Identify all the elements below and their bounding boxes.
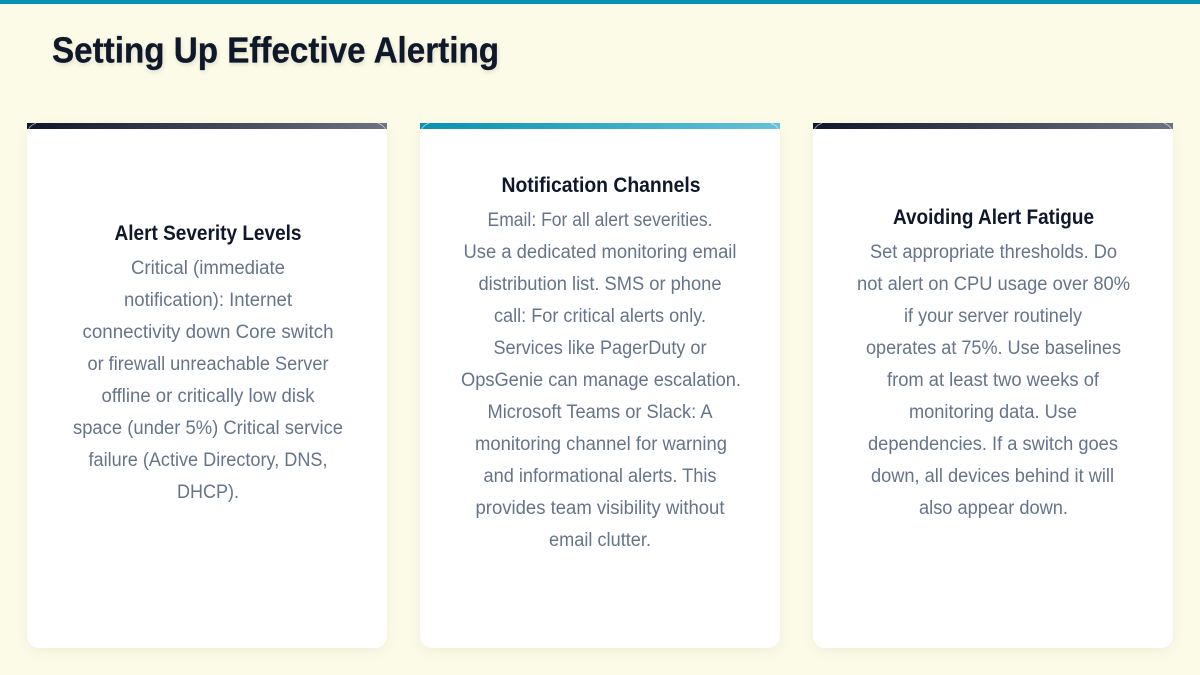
text block: channels description [461,210,741,551]
panel text [857,206,1130,519]
text block: fatigue description: if your server routinely [904,306,1082,327]
text block: fatigue description: not alert on CPU usage over 80% [857,274,1130,295]
text block: fatigue description: down, all devices behind it will [871,466,1114,487]
text block: fatigue description: Set appropriate thresholds. Do [870,242,1117,263]
text block: fatigue description [857,242,1130,519]
text block: fatigue description: dependencies. If a switch goes [868,434,1118,455]
text block: severity description [73,258,343,503]
text block: fatigue description: also appear down. [919,498,1068,519]
panel accent bar [420,123,780,129]
text block: severity description: space (under 5%) Critical service [73,418,343,439]
panel accent bar [27,123,387,129]
text block: severity description: offline or critically low disk [102,386,315,407]
text block: severity description: DHCP). [177,482,239,503]
text block: severity description: connectivity down Core switch [82,322,334,343]
text block: severity description: failure (Active Directory, DNS, [88,450,328,471]
title: Setting Up Effective Alerting [52,30,499,70]
text block: channels description: and informational alerts. This [484,466,716,487]
panel: avoiding alert fatigue [813,123,1173,648]
text block: severity description: or firewall unreachable Server [88,354,329,375]
heading: alert severity levels: Alert Severity Levels [114,222,302,245]
text block: channels description: provides team visibility without [476,498,725,519]
text block: severity description: notification): Internet [124,290,293,311]
text block: channels description: Use a dedicated monitoring email [464,242,736,263]
text block: fatigue description: monitoring data. Use [909,402,1077,423]
text block: channels description: email clutter. [549,530,651,551]
panel text [73,222,343,503]
text block: fatigue description: from at least two weeks of [887,370,1100,391]
text block: channels description: Email: For all alert severities. [488,210,712,231]
heading: notification channels: Notification Channels [502,174,700,197]
top accent bar [0,0,1200,4]
text block: fatigue description: operates at 75%. Use baselines [866,338,1121,359]
panel text [461,174,741,551]
panel accent bar [813,123,1173,129]
text block: channels description: distribution list. SMS or phone [478,274,722,295]
text block: channels description: monitoring channel for warning [475,434,727,455]
text block: severity description: Critical (immediate [131,258,285,279]
heading: avoiding alert fatigue: Avoiding Alert Fatigue [893,206,1094,229]
panel: notification channels [420,123,780,648]
text block: channels description: call: For critical alerts only. [494,306,706,327]
text block: channels description: Microsoft Teams or Slack: A [488,402,713,423]
text block: channels description: Services like PagerDuty or [494,338,707,359]
text block: channels description: OpsGenie can manage escalation. [461,370,741,391]
panel: alert severity levels [27,123,387,648]
